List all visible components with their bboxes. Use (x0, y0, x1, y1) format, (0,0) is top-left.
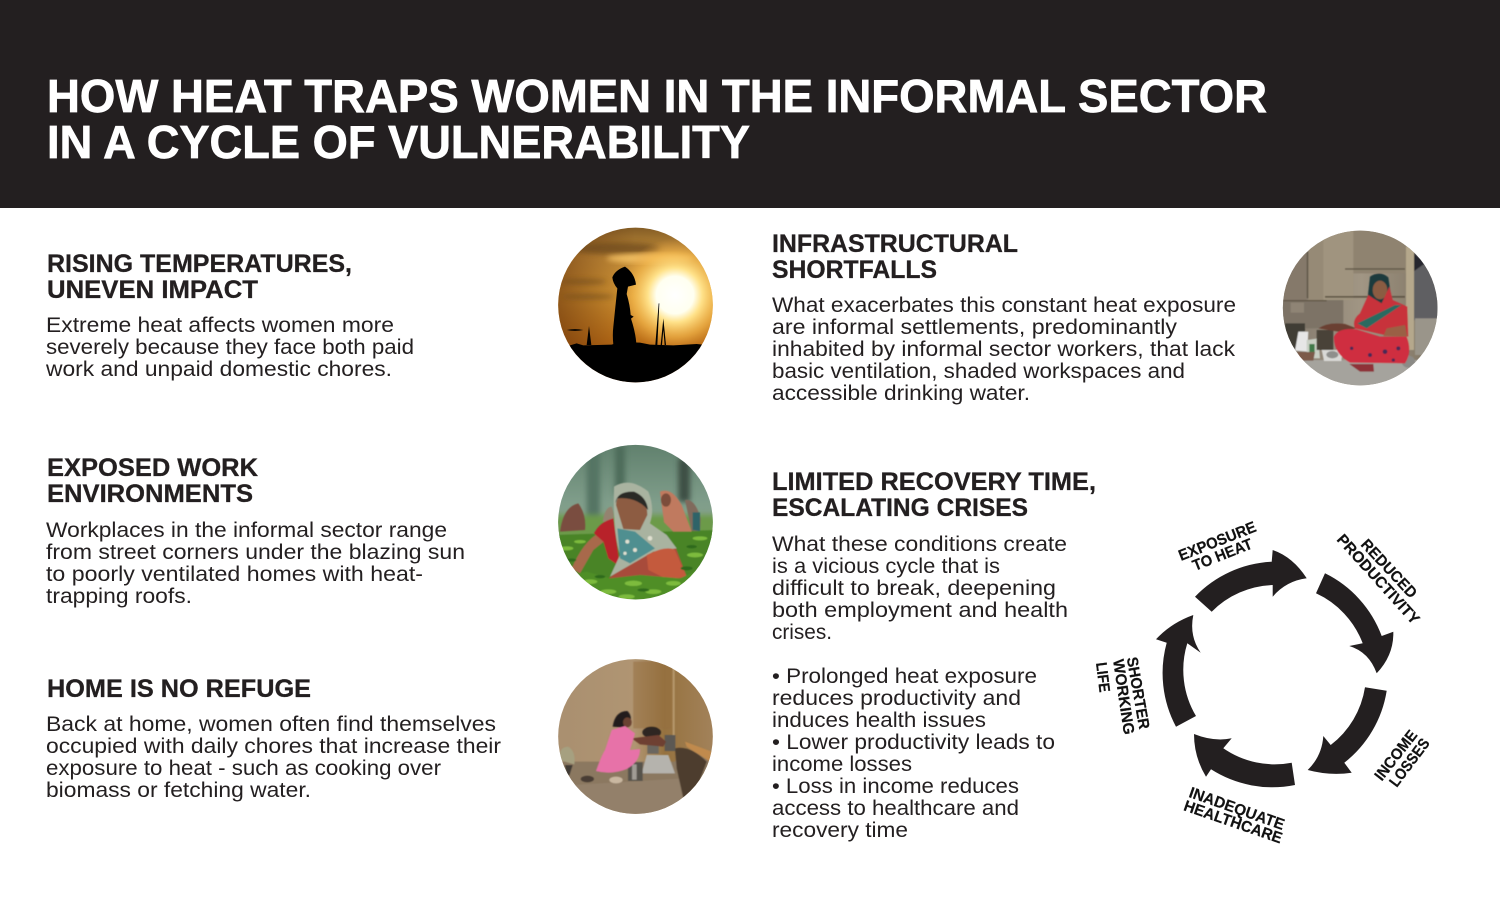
heading: infrastructural shortfalls (772, 230, 1018, 284)
text: limited recovery intro: difficult to break, deepening (772, 577, 1056, 600)
text: limited recovery bullet list: induces health issues (772, 709, 986, 732)
woman (572, 534, 604, 574)
text: infrastructural shortfalls: accessible drinking water. (772, 382, 1030, 405)
text: limited recovery bullet list: • Loss in income reduces (772, 775, 1019, 798)
text: home is no refuge: biomass or fetching water. (46, 779, 311, 802)
text: infrastructural shortfalls: basic ventilation, shaded workspaces and (772, 360, 1185, 383)
panel: exposed work environments (46, 442, 717, 608)
panel: infrastructural shortfalls (772, 227, 1443, 405)
text: infrastructural shortfalls (772, 294, 1236, 405)
heading: infrastructural shortfalls: INFRASTRUCTURAL (772, 230, 1018, 258)
text: home is no refuge: occupied with daily chores that increase their (46, 735, 501, 758)
text: limited recovery intro: What these conditions create (772, 533, 1067, 556)
heading: limited recovery time: LIMITED RECOVERY TIME, (772, 468, 1096, 496)
text: rising temperatures: severely because they face both paid (46, 336, 414, 359)
text: infrastructural shortfalls: inhabited by informal sector workers, that lack (772, 338, 1236, 361)
label: income losses: LOSSES (1386, 735, 1434, 790)
label: exposure to heat: EXPOSURE (1176, 519, 1259, 565)
label: reduced productivity: PRODUCTIVITY (1333, 531, 1423, 629)
text: limited recovery bullet list: recovery time (772, 819, 908, 842)
label: inadequate healthcare: INADEQUATE (1187, 784, 1287, 834)
arrow: shorter working life to exposure (1156, 615, 1201, 727)
photo: woman seated outside a makeshift home (1280, 227, 1443, 390)
panel: limited recovery time (772, 468, 1096, 842)
photo: woman cooking over a biomass stove (553, 655, 717, 818)
label: shorter working life: LIFE (1092, 661, 1113, 693)
label: income losses: INCOME (1371, 727, 1421, 784)
chart: vicious cycle diagram (1092, 519, 1434, 847)
text: infrastructural shortfalls: What exacerbates this constant heat exposure (772, 294, 1236, 317)
title (47, 70, 1267, 168)
text: limited recovery bullet list (772, 665, 1055, 842)
title: IN A CYCLE OF VULNERABILITY (47, 116, 750, 168)
text: limited recovery bullet list: access to healthcare and (772, 797, 1019, 820)
ground and silhouette (567, 266, 702, 382)
text: infrastructural shortfalls: are informal settlements, predominantly (772, 316, 1178, 339)
text: exposed work environments: to poorly ventilated homes with heat- (46, 563, 423, 586)
title: HOW HEAT TRAPS WOMEN IN THE INFORMAL SECTOR (47, 70, 1267, 122)
text: rising temperatures: Extreme heat affects women more (46, 314, 394, 337)
heading: exposed work environments: ENVIRONMENTS (47, 480, 253, 508)
text: exposed work environments: from street corners under the blazing sun (46, 541, 465, 564)
text: home is no refuge: Back at home, women often find themselves (46, 713, 496, 736)
label: exposure to heat: TO HEAT (1190, 536, 1256, 575)
label: shorter working life (1092, 656, 1152, 736)
label: inadequate healthcare: HEALTHCARE (1181, 798, 1284, 847)
text: exposed work environments: Workplaces in the informal sector range (46, 519, 447, 542)
heading: rising temperatures: UNEVEN IMPACT (47, 276, 258, 304)
heading: exposed work environments: EXPOSED WORK (47, 454, 258, 482)
heading: rising temperatures (47, 250, 352, 304)
text: limited recovery bullet list: reduces productivity and (772, 687, 1021, 710)
woman (1367, 273, 1390, 304)
text: limited recovery intro: crises. (772, 621, 832, 644)
panel: rising temperatures (45, 223, 732, 388)
arrow: income losses to inadequate healthcare (1308, 687, 1387, 774)
photo: woman picking tea leaves (553, 442, 717, 605)
panel: home is no refuge (46, 655, 717, 818)
heading: rising temperatures: RISING TEMPERATURES, (47, 250, 352, 278)
heading: home is no refuge: HOME IS NO REFUGE (47, 675, 311, 703)
photo: woman silhouetted at sunset (558, 228, 713, 382)
text: limited recovery intro (772, 533, 1068, 644)
text: limited recovery bullet list: income losses (772, 753, 912, 776)
arrow: inadequate healthcare to shorter working life (1194, 734, 1295, 787)
text: limited recovery bullet list: • Prolonged heat exposure (772, 665, 1037, 688)
arrow: exposure to reduced productivity (1195, 550, 1307, 612)
text: limited recovery intro: both employment and health (772, 599, 1068, 622)
heading: limited recovery time (772, 468, 1096, 522)
label: reduced productivity: REDUCED (1357, 536, 1420, 602)
arrow: reduced productivity to income losses (1316, 573, 1393, 673)
woman (613, 711, 631, 728)
text: exposed work environments: trapping roofs. (46, 585, 192, 608)
heading: limited recovery time: ESCALATING CRISES (772, 494, 1028, 522)
text: rising temperatures (45, 314, 414, 381)
header band (0, 0, 1500, 208)
label: shorter working life: WORKING (1109, 658, 1137, 736)
text: limited recovery intro: is a vicious cycle that is (772, 555, 1000, 578)
text: home is no refuge: exposure to heat - such as cooking over (46, 757, 441, 780)
text: rising temperatures: work and unpaid domestic chores. (45, 358, 392, 381)
label: shorter working life: SHORTER (1123, 656, 1152, 731)
heading: infrastructural shortfalls: SHORTFALLS (772, 256, 937, 284)
text: exposed work environments (46, 519, 465, 608)
text: home is no refuge (46, 713, 501, 802)
heading: exposed work environments (47, 454, 258, 508)
text: limited recovery bullet list: • Lower productivity leads to (772, 731, 1055, 754)
